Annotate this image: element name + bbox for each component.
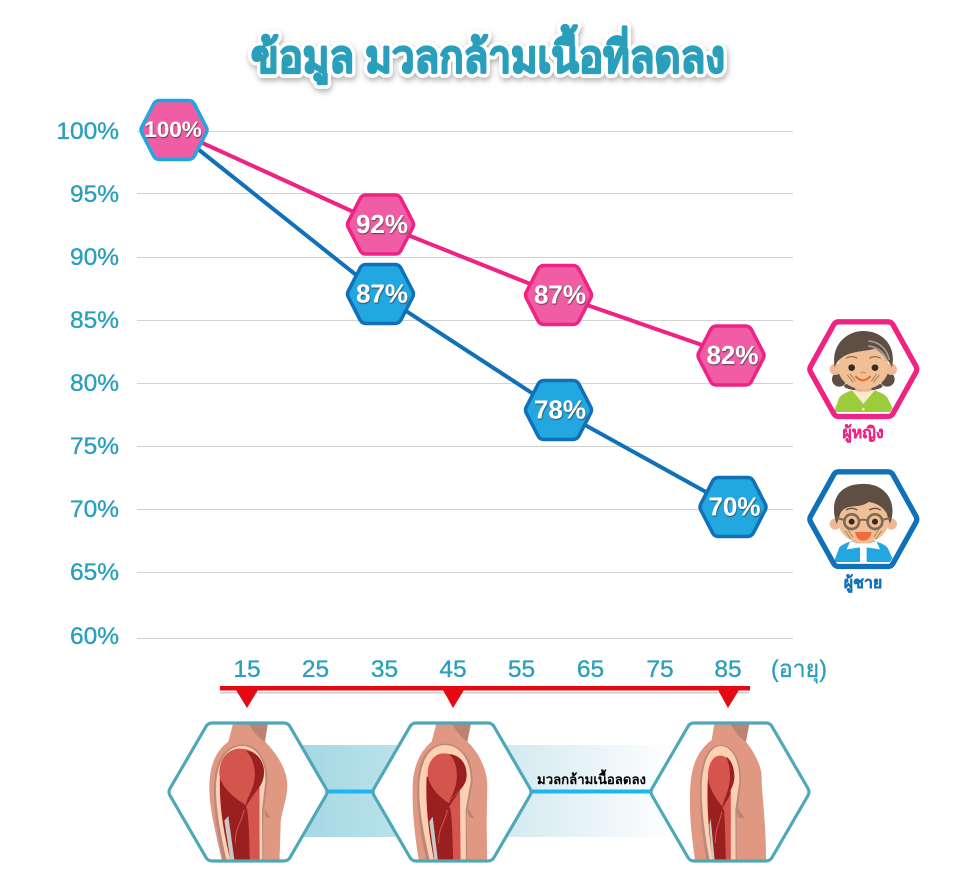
icon: arm cross-section, age 15	[169, 720, 327, 867]
x axis age labels: 55	[508, 656, 535, 683]
title: ข้อมูล มวลกล้ามเนื้อที่ลดลง	[251, 24, 725, 84]
y axis labels: 75%	[70, 433, 119, 460]
marker: men 70%: 70%	[708, 492, 761, 522]
title: ข้อมูล มวลกล้ามเนื้อที่ลดลง	[251, 24, 725, 84]
marker: women 92%	[348, 195, 414, 254]
marker: women 82%: 82%	[706, 340, 759, 370]
y axis labels: 85%	[70, 307, 119, 334]
marker: men 70%	[700, 478, 766, 536]
marker: women 82%	[698, 326, 764, 385]
label: women: ผู้หญิง	[842, 424, 884, 444]
y axis labels: 60%	[70, 623, 119, 650]
y axis labels: 70%	[70, 496, 119, 523]
marker: women 87%: 87%	[534, 280, 586, 310]
marker: men 78%	[526, 380, 592, 440]
marker: men 78%: 78%	[534, 394, 586, 424]
label: men: ผู้ชาย	[844, 574, 882, 594]
marker: start 100%: 100%	[144, 117, 202, 142]
x axis age labels	[233, 656, 827, 684]
x axis age labels: (อายุ)	[771, 656, 827, 684]
connector band: right	[505, 745, 675, 837]
marker: women 92%: 92%	[356, 209, 408, 239]
line: women	[174, 130, 731, 355]
marker: men 87%	[348, 264, 414, 324]
icon: elderly woman	[810, 322, 917, 416]
caption: muscle mass decreases: มวลกล้ามเนื้อลดลง	[537, 769, 646, 787]
x axis age labels: 35	[371, 656, 398, 683]
y axis labels: 95%	[70, 181, 119, 208]
connector band: left	[298, 745, 400, 837]
y axis labels: 80%	[70, 370, 119, 397]
chart grid lines	[137, 132, 793, 638]
connector lines	[326, 790, 652, 794]
x axis age labels: 45	[439, 656, 467, 683]
y axis labels: 65%	[70, 559, 119, 586]
marker: men 87%: 87%	[356, 278, 408, 308]
x axis age labels: 25	[302, 656, 329, 683]
marker: women 87%	[526, 266, 592, 324]
icon: arm cross-section, age 85	[651, 720, 809, 867]
x axis age labels: 15	[233, 656, 261, 683]
x axis age labels: 75	[646, 656, 674, 683]
age timeline bar	[220, 686, 750, 708]
line: men	[174, 130, 733, 507]
x axis age labels: 65	[577, 656, 604, 683]
marker: start 100%	[141, 100, 207, 160]
y axis labels: 90%	[70, 244, 119, 271]
y axis labels	[56, 118, 119, 650]
icon: arm cross-section, age 45	[373, 720, 531, 867]
icon: elderly man	[810, 472, 917, 566]
x axis age labels: 85	[714, 656, 742, 683]
y axis labels: 100%	[56, 118, 119, 145]
